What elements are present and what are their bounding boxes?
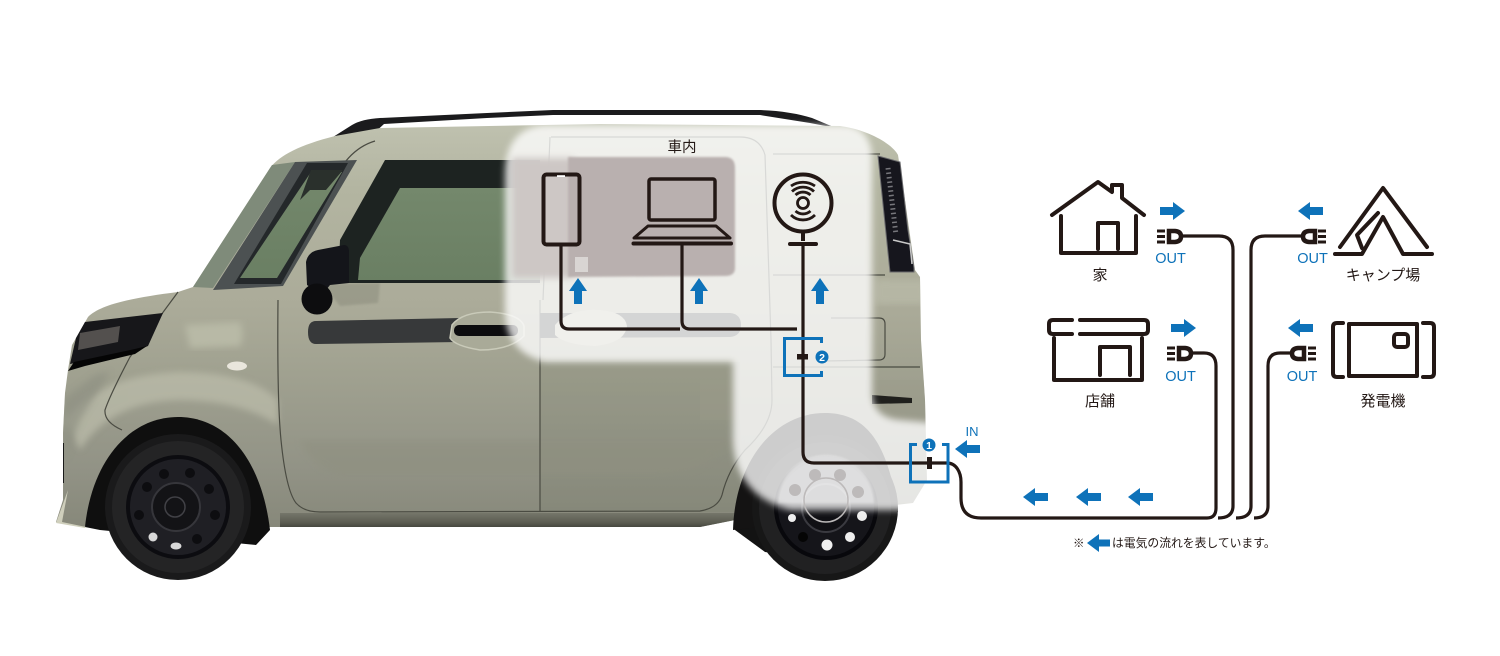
label: campsite: キャンプ場	[1346, 267, 1420, 284]
headlight	[68, 313, 163, 371]
tail lamp	[878, 156, 914, 272]
label: generator: 発電機	[1360, 393, 1406, 410]
footnote: ※	[1073, 538, 1084, 550]
front bumper lip	[56, 490, 86, 528]
icon: tent	[1335, 188, 1432, 254]
turn signal	[227, 362, 247, 370]
front wheel	[105, 434, 251, 580]
body shading	[60, 280, 930, 529]
rear arch	[733, 413, 898, 530]
side window frame	[338, 160, 540, 283]
footnote: は電気の流れを表しています。	[1112, 536, 1276, 550]
label: store: 店舗	[1085, 393, 1115, 410]
plug: house	[1157, 231, 1181, 242]
label: out store: OUT	[1165, 369, 1196, 385]
roof rail	[333, 110, 836, 137]
label: out house: OUT	[1155, 251, 1186, 267]
quarter glass frame	[234, 163, 348, 284]
panel lines	[105, 137, 920, 512]
arrow: campsite out	[1298, 202, 1323, 220]
translucent white highlight over cabin and rear wheel	[505, 125, 945, 510]
car body	[56, 124, 927, 527]
label: IN: IN	[966, 424, 978, 439]
icon: laptop	[634, 179, 731, 244]
bracket 1: 1	[926, 440, 932, 452]
footnote	[1073, 534, 1276, 552]
arrow: house out	[1160, 202, 1185, 220]
icon: wireless charger	[774, 174, 832, 244]
door handle front	[450, 312, 524, 350]
arrow: store out	[1171, 319, 1196, 337]
wiring: cabin devices	[561, 236, 1302, 518]
icon: smartphone	[544, 174, 580, 244]
label: cabin: 車内	[668, 139, 696, 156]
rear wheel rim seen through highlight	[778, 455, 874, 522]
flow arrows up	[569, 278, 829, 304]
label: out campsite: OUT	[1297, 251, 1328, 267]
icon: generator	[1333, 323, 1434, 377]
bracket 2: 2	[819, 352, 825, 364]
door stripe rear	[540, 313, 741, 338]
quarter glass	[240, 172, 342, 278]
infographic canvas	[56, 110, 1436, 581]
plug: generator	[1292, 348, 1316, 359]
bracket 2	[784, 338, 828, 376]
side window glass	[358, 188, 540, 280]
front arch	[85, 417, 270, 545]
icon: store	[1049, 320, 1148, 380]
door stripe front	[308, 318, 460, 344]
icon: house	[1052, 182, 1144, 253]
rear wheel arch dark	[735, 480, 820, 560]
windshield glass	[193, 162, 295, 288]
door handle rear	[555, 310, 627, 346]
rear wheel	[752, 435, 898, 581]
vehicle	[56, 110, 930, 581]
a-pillar	[213, 160, 357, 290]
arrow: generator out	[1288, 319, 1313, 337]
bracket 1	[910, 438, 948, 482]
flow arrows left	[955, 440, 1153, 506]
rear window seen through highlight	[512, 157, 735, 278]
plug: store	[1167, 348, 1191, 359]
label: house: 家	[1092, 267, 1108, 284]
plug: campsite	[1303, 231, 1326, 242]
label: out generator: OUT	[1287, 369, 1317, 385]
door mirror	[302, 245, 349, 314]
